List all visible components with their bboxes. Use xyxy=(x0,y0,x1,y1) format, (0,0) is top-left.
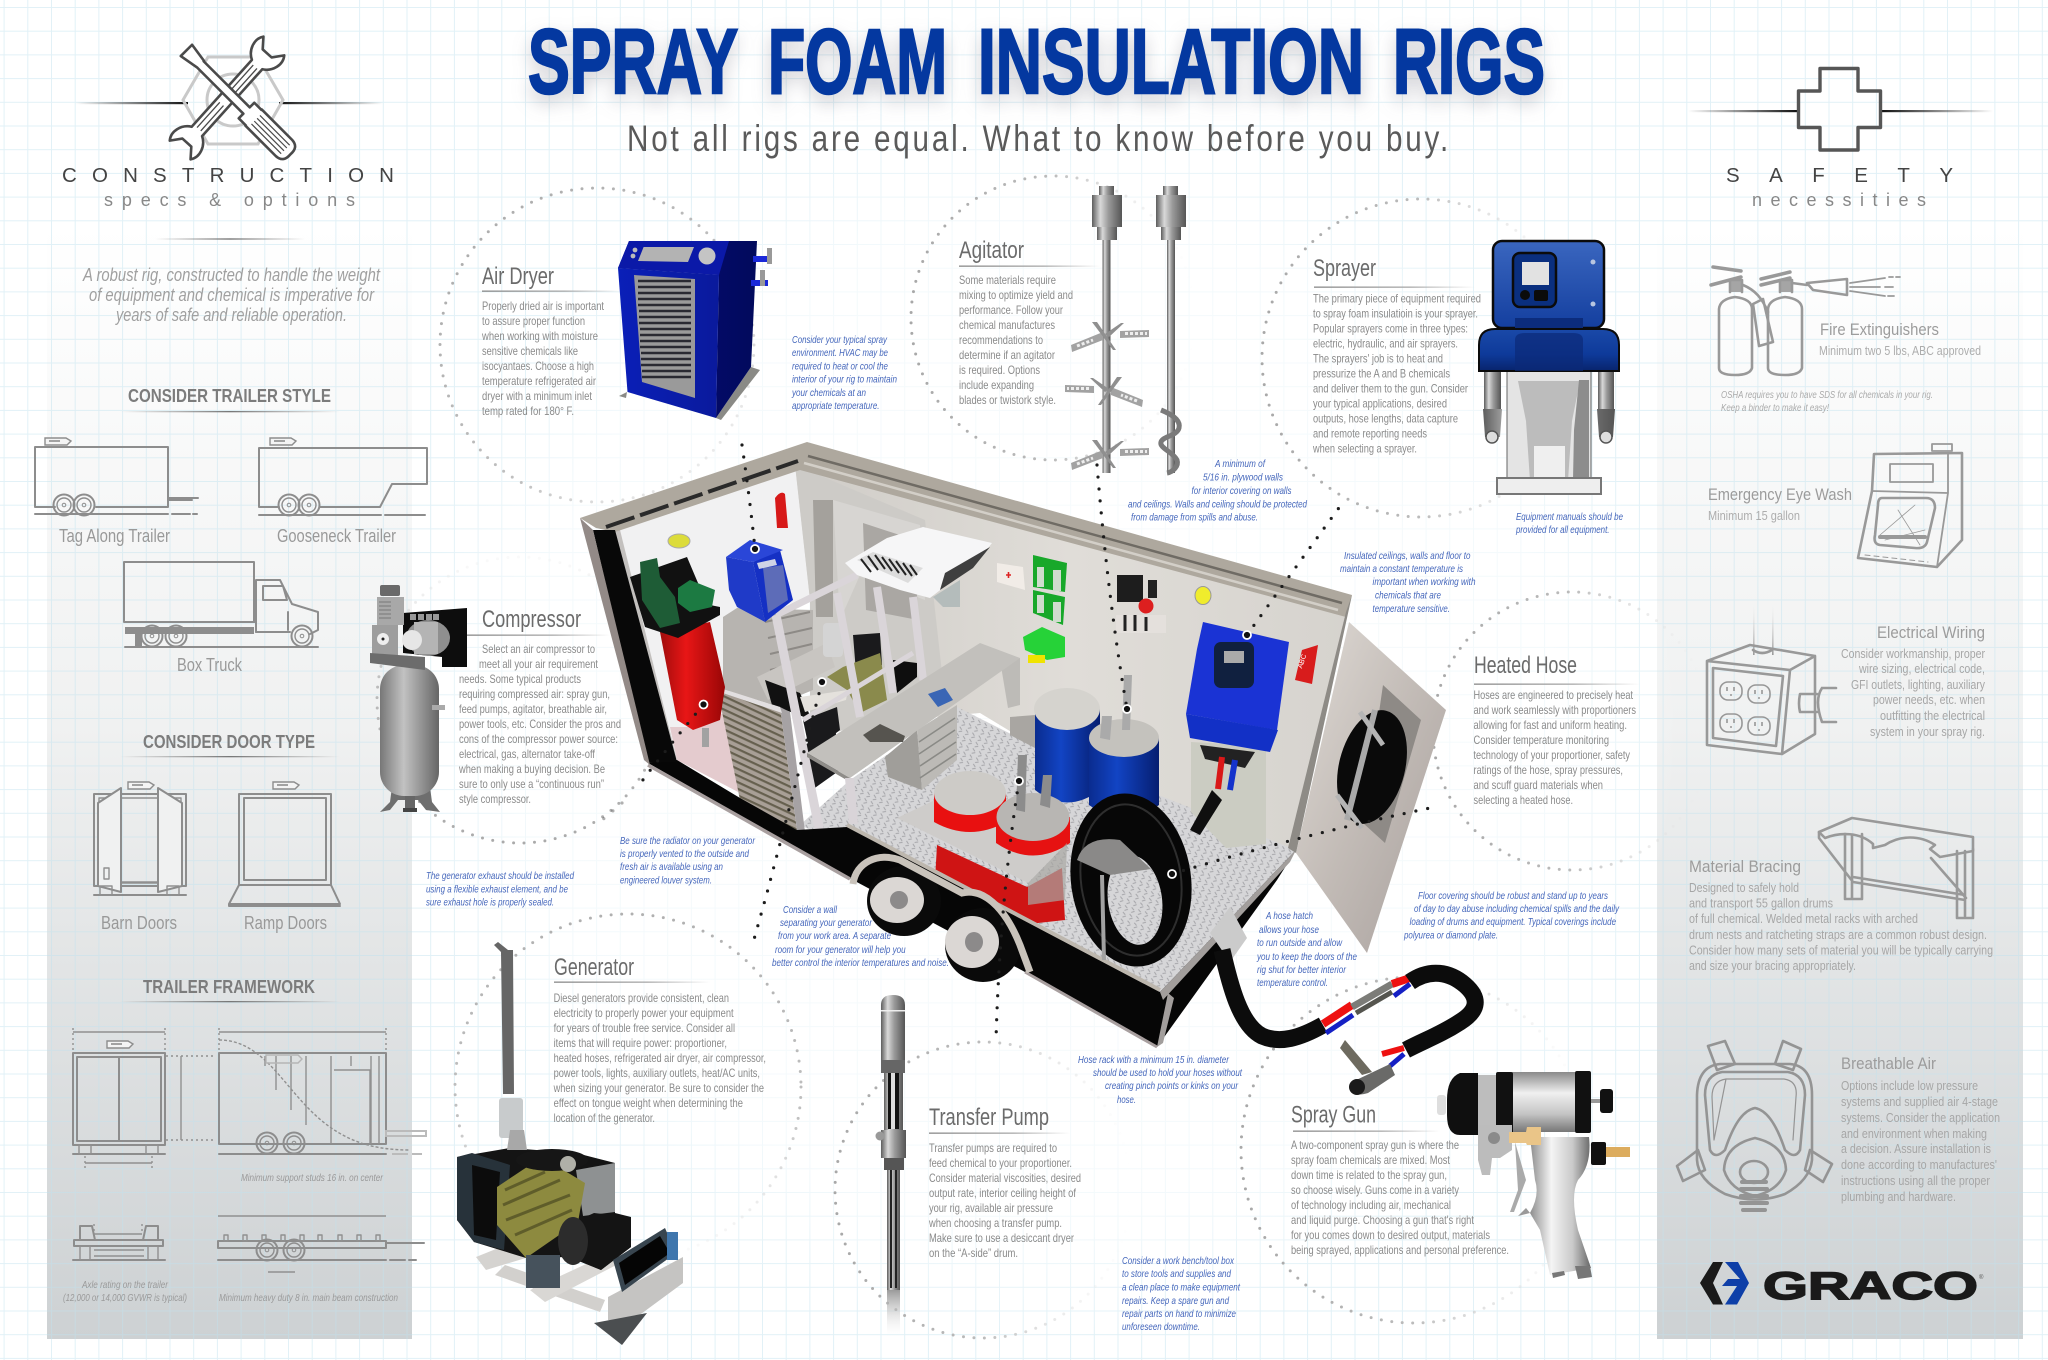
callout: air dryer: dryer with a minimum inlet xyxy=(482,389,593,403)
callout: air dryer: Properly dried air is important xyxy=(482,299,605,313)
callout: air dryer: when working with moisture xyxy=(481,329,598,343)
text: electrical wiring xyxy=(1841,624,1986,739)
text: breathable air: done according to manufactures' xyxy=(1841,1158,1997,1172)
note: hose hatch: allows your hose xyxy=(1259,924,1319,936)
text: breathable air: systems. Consider the application xyxy=(1841,1111,2000,1125)
text: emergency eye wash: Minimum 15 gallon xyxy=(1708,509,1800,523)
callout: compressor: feed pumps, agitator, breathable air, xyxy=(459,702,607,716)
title: INSULATION xyxy=(978,11,1364,113)
heading: consider door type: CONSIDER DOOR TYPE xyxy=(143,732,315,752)
icon: transfer pump xyxy=(876,995,906,1336)
note: hose hatch: A hose hatch xyxy=(1265,910,1313,922)
callout: heated hose: allowing for fast and uniform heating. xyxy=(1474,718,1627,732)
illustration: hose and small gun xyxy=(1222,950,1475,1095)
callout: generator: Diesel generators provide consistent, clean xyxy=(554,991,729,1005)
heading: consider trailer style: CONSIDER TRAILER STYLE xyxy=(128,386,331,406)
note: hose hatch: rig shut for better interior xyxy=(1257,964,1346,976)
note: plywood walls: 5/16 in. plywood walls xyxy=(1203,472,1284,484)
callout: air dryer: sensitive chemicals like xyxy=(482,344,578,358)
note: typical spray environment: Consider your typical spray xyxy=(792,334,888,346)
door labels xyxy=(101,913,327,933)
callout: sprayer: electric, hydraulic, and air sprayers. xyxy=(1313,336,1458,350)
callout: generator xyxy=(553,954,766,1125)
text: breathable air: and environment when making xyxy=(1841,1127,1987,1141)
subheading: necessities: necessities xyxy=(1752,190,1926,210)
note: insulated ceilings: chemicals that are xyxy=(1375,590,1441,602)
callout: air dryer: isocyantaes. Choose a high xyxy=(482,359,594,373)
icon: box truck xyxy=(124,562,318,648)
callout: agitator: include expanding xyxy=(959,378,1034,392)
callout: transfer pump: when choosing a transfer pump. xyxy=(928,1216,1062,1230)
callout: spray gun: down time is related to the spray gun, xyxy=(1291,1168,1447,1182)
note: plywood walls: and ceilings. Walls and ceiling should be protected xyxy=(1128,498,1308,510)
callout: spray gun: and liquid purge. Choosing a gun that's right xyxy=(1291,1213,1475,1227)
subheading: specs and options: specs & options xyxy=(104,190,355,210)
callout: generator: when sizing your generator. Be sure to consider the xyxy=(553,1081,764,1095)
callout: agitator: recommendations to xyxy=(959,333,1043,347)
note: plywood walls: from damage from spills and abuse. xyxy=(1131,512,1258,524)
note: work bench: Consider a work bench/tool box xyxy=(1122,1255,1235,1267)
callout: agitator: determine if an agitator xyxy=(959,348,1055,362)
note: hose rack xyxy=(1078,1054,1243,1106)
callout: spray gun: so choose wisely. Guns come in a variety xyxy=(1291,1183,1459,1197)
callout: heated hose: Heated Hose xyxy=(1474,652,1577,679)
note: typical spray environment: appropriate temperature. xyxy=(792,400,880,412)
panel: safety background xyxy=(1657,225,2023,1339)
text: electrical wiring: system in your spray rig. xyxy=(1870,725,1985,739)
callout: spray gun: of technology including air, mechanical xyxy=(1291,1198,1451,1212)
yellow light right xyxy=(1195,586,1211,604)
top rail xyxy=(580,442,1352,617)
note: typical spray environment: environment. HVAC may be xyxy=(792,347,888,359)
icon: material bracing rack xyxy=(1819,818,1973,918)
text: breathable air: Breathable Air xyxy=(1841,1055,1936,1073)
note: plywood walls: for interior covering on walls xyxy=(1192,485,1292,497)
note: floor covering: Floor covering should be robust and stand up to years xyxy=(1418,890,1609,902)
callout: spray gun: for you comes down to desired output, materials xyxy=(1291,1228,1490,1242)
callout: sprayer: and remote reporting needs xyxy=(1313,426,1427,440)
callout: agitator: performance. Follow your xyxy=(959,303,1063,317)
icon: fire extinguishers xyxy=(1711,267,1900,375)
callout: agitator xyxy=(959,237,1100,407)
callout: transfer pump: Transfer pumps are required to xyxy=(929,1141,1057,1155)
callout: heated hose: and scuff guard materials when xyxy=(1474,778,1603,792)
captions: axle and beam: Minimum heavy duty 8 in. main beam construction xyxy=(219,1292,398,1304)
icon: sprayer unit xyxy=(1479,241,1619,494)
callout: sprayer: when selecting a sprayer. xyxy=(1312,442,1417,456)
callout: compressor xyxy=(458,606,621,806)
icon: gooseneck trailer xyxy=(259,438,427,516)
rear black frame xyxy=(593,530,677,763)
icon: eye wash station xyxy=(1858,444,1962,567)
note: OSHA SDS xyxy=(1721,390,1933,414)
icon: crossed tools xyxy=(75,35,383,163)
text: electrical wiring: outfitting the electrical xyxy=(1880,709,1985,723)
dotted circles behind feature callouts xyxy=(377,176,1711,1338)
callout: sprayer: Sprayer xyxy=(1313,255,1376,282)
text: emergency eye wash: Emergency Eye Wash xyxy=(1708,486,1852,504)
callout: generator: effect on tongue weight when determining the xyxy=(554,1096,743,1110)
icon: agitators xyxy=(1065,186,1186,473)
panel: construction background xyxy=(47,225,412,1339)
callout: sprayer: and deliver them to the gun. Consider xyxy=(1313,382,1468,396)
note: hose hatch xyxy=(1256,910,1357,989)
first aid box xyxy=(997,563,1025,590)
callout: spray gun: spray foam chemicals are mixed. Most xyxy=(1291,1153,1451,1167)
callout: air dryer: temp rated for 180° F. xyxy=(482,404,574,418)
title: SPRAY xyxy=(528,11,738,113)
text: material bracing: and transport 55 gallon drums xyxy=(1689,896,1833,910)
diagram: axle front view xyxy=(73,1224,165,1260)
ring markers xyxy=(700,545,1251,878)
note: hose rack: Hose rack with a minimum 15 in. diameter xyxy=(1078,1054,1229,1066)
hose hatch xyxy=(1210,907,1247,962)
note: floor covering xyxy=(1403,890,1620,942)
dotted leader lines xyxy=(600,445,1435,1040)
caption: support studs: Minimum support studs 16 in. on center xyxy=(241,1172,383,1184)
intro text: construction xyxy=(82,265,381,325)
note: work bench: to store tools and supplies and xyxy=(1122,1268,1232,1280)
sprayer in trailer xyxy=(1186,622,1289,848)
trailer labels xyxy=(59,526,396,675)
note: hose rack: hose. xyxy=(1117,1094,1136,1106)
trailer labels: Box Truck xyxy=(177,655,243,675)
callout: spray gun: Spray Gun xyxy=(1291,1102,1376,1128)
icon: barn doors xyxy=(94,782,186,895)
note: work bench: repairs. Keep a spare gun and xyxy=(1122,1295,1230,1307)
note: floor covering: loading of drums and equipment. Typical coverings include xyxy=(1410,916,1616,928)
note: insulated ceilings: temperature sensitive. xyxy=(1372,603,1450,615)
wheels xyxy=(853,857,1030,982)
note: hose rack: creating pinch points or kinks on your xyxy=(1105,1080,1238,1092)
note: insulated ceilings: important when working with xyxy=(1372,576,1476,588)
door jamb xyxy=(1288,595,1352,853)
callout: compressor: Compressor xyxy=(482,606,581,633)
callout: compressor: meet all your air requirement xyxy=(479,657,599,671)
note: radiator: fresh air is available using an xyxy=(620,861,723,873)
note: plywood walls: A minimum of xyxy=(1214,458,1266,470)
trailer labels: Tag Along Trailer xyxy=(59,526,170,546)
text: fire extinguishers: Minimum two 5 lbs, ABC approved xyxy=(1819,344,1981,358)
note: generator exhaust: sure exhaust hole is properly sealed. xyxy=(426,896,554,908)
note: radiator: engineered louver system. xyxy=(620,874,712,886)
subtitle: Not all rigs are equal. What to know before you buy. xyxy=(627,118,1451,159)
callout: transfer pump: feed chemical to your proportioner. xyxy=(929,1156,1072,1170)
heading: trailer framework: TRAILER FRAMEWORK xyxy=(143,977,315,997)
text: breathable air xyxy=(1841,1055,2000,1204)
text: breathable air: instructions using all the proper xyxy=(1841,1174,1990,1188)
generator room equipment xyxy=(723,608,917,790)
note: radiator: Be sure the radiator on your generator xyxy=(620,835,755,847)
icon: generator xyxy=(457,942,683,1345)
note: wall separating generator xyxy=(772,904,949,969)
diagram: framework front view xyxy=(73,1028,216,1170)
callout: sprayer xyxy=(1312,255,1481,456)
callout: agitator: is required. Options xyxy=(959,363,1040,377)
louver panel xyxy=(717,687,797,830)
note: wall separating generator: from your work area. A separate xyxy=(778,930,891,942)
intro text: construction: A robust rig, constructed to handle the weight xyxy=(82,265,381,285)
text: material bracing: drum nests and ratcheting straps are a common robust design. xyxy=(1689,928,1987,942)
note: equipment manuals xyxy=(1515,511,1623,536)
callout: heated hose: ratings of the hose, spray pressures, xyxy=(1474,763,1623,777)
callout: generator: electricity to properly power your equipment xyxy=(554,1006,734,1020)
callout: sprayer: pressurize the A and B chemicals xyxy=(1313,366,1450,380)
note: hose rack: should be used to hold your hoses without xyxy=(1093,1067,1243,1079)
text: electrical wiring: GFI outlets, lighting, auxiliary xyxy=(1851,678,1986,692)
heading: safety: SAFETY xyxy=(1726,164,1953,187)
text: material bracing: and size your bracing appropriately. xyxy=(1689,959,1856,973)
note: radiator xyxy=(620,835,755,886)
callout: transfer pump: Transfer Pump xyxy=(929,1104,1049,1131)
note: typical spray environment: interior of your rig to maintain xyxy=(792,374,897,386)
callout: generator: Generator xyxy=(554,954,634,981)
text: material bracing: Material Bracing xyxy=(1689,858,1801,876)
door labels: Ramp Doors xyxy=(244,913,327,933)
icon: air dryer unit xyxy=(618,241,772,420)
note: hose hatch: temperature control. xyxy=(1257,977,1328,989)
green compressor motor xyxy=(630,557,720,638)
first aid cross xyxy=(1006,572,1011,578)
logo: graco: ® xyxy=(1979,1274,1984,1281)
icon: electrical box xyxy=(1707,603,1836,754)
air conditioner unit xyxy=(845,527,992,607)
callout: transfer pump: on the “A-side” drum. xyxy=(929,1246,1018,1260)
text: fire extinguishers xyxy=(1819,321,1981,358)
logo: graco xyxy=(1700,1262,1984,1308)
blue drums xyxy=(1034,675,1159,818)
hose reel xyxy=(1059,785,1203,975)
red air compressor tank xyxy=(660,622,725,730)
partition frame xyxy=(776,575,923,833)
callout: generator: heated hoses, refrigerated air dryer, air compressor, xyxy=(554,1051,766,1065)
captions: axle and beam xyxy=(63,1279,398,1304)
text: breathable air: Options include low pressure xyxy=(1841,1079,1978,1093)
callout: generator: location of the generator. xyxy=(554,1111,655,1125)
text: emergency eye wash xyxy=(1708,486,1852,523)
illustration: trailer interior cutaway xyxy=(580,442,1446,1047)
callout: spray gun xyxy=(1291,1102,1509,1257)
table and red drums xyxy=(897,755,1070,925)
callout: transfer pump: your rig, available air pressure xyxy=(929,1201,1053,1215)
title xyxy=(528,11,1545,113)
callout: air dryer: to assure proper function xyxy=(482,314,585,328)
callout: spray gun: being sprayed, applications and personal preference. xyxy=(1291,1243,1509,1257)
callout: agitator: blades or twistork style. xyxy=(959,393,1056,407)
note: wall separating generator: separating your generator xyxy=(780,917,872,929)
callout: heated hose: and work seamlessly with proportioners xyxy=(1474,703,1636,717)
note: equipment manuals: provided for all equipment. xyxy=(1515,524,1610,536)
callout: compressor: cons of the compressor power source: xyxy=(459,732,618,746)
callout: sprayer: The primary piece of equipment required xyxy=(1313,292,1481,306)
note: radiator: is properly vented to the outside and xyxy=(620,848,750,860)
note: floor covering: polyurea or diamond plate. xyxy=(1403,930,1498,942)
callout: sprayer: The sprayers' job is to heat and xyxy=(1313,352,1443,366)
callout: sprayer: outputs, hose lengths, data capture xyxy=(1313,412,1458,426)
callout: transfer pump xyxy=(928,1104,1081,1260)
note: wall separating generator: Consider a wall xyxy=(783,904,837,916)
callout: compressor: electrical, gas, alternator take-off xyxy=(459,747,596,761)
text: material bracing: of full chemical. Welded metal racks with arched xyxy=(1689,912,1918,926)
callout: agitator: chemical manufactures xyxy=(959,318,1055,332)
diagram: main beam side view xyxy=(218,1216,424,1272)
note: hose hatch: you to keep the doors of the xyxy=(1256,951,1357,963)
captions: axle and beam: (12,000 or 14,000 GVWR is typical) xyxy=(63,1292,187,1304)
callout: compressor: requiring compressed air: spray gun, xyxy=(459,687,610,701)
callout: compressor: Select an air compressor to xyxy=(482,642,595,656)
title: RIGS xyxy=(1393,11,1545,113)
callout: compressor: power tools, etc. Consider the pros and xyxy=(459,717,621,731)
callout: heated hose: Hoses are engineered to precisely heat xyxy=(1474,688,1634,702)
note: work bench xyxy=(1122,1255,1241,1333)
trailer labels: Gooseneck Trailer xyxy=(277,526,396,546)
text: material bracing: Designed to safely hold xyxy=(1689,881,1799,895)
fire extinguisher right: ABC xyxy=(1297,654,1308,669)
callout: transfer pump: Consider material viscosities, desired xyxy=(929,1171,1081,1185)
icon: respirator mask xyxy=(1677,1041,1832,1210)
fire extinguisher right xyxy=(1295,645,1318,684)
work bench xyxy=(807,643,1020,824)
green chemical station xyxy=(1023,555,1067,663)
text: breathable air: plumbing and hardware. xyxy=(1841,1190,1956,1204)
note: typical spray environment xyxy=(791,334,897,412)
note: wall separating generator: better control the interior temperatures and noise. xyxy=(772,957,949,969)
section header: safety xyxy=(1688,68,1993,210)
callout: air dryer: Air Dryer xyxy=(482,263,554,290)
note: generator exhaust: The generator exhaust should be installed xyxy=(426,870,575,882)
note: hose hatch: to run outside and allow xyxy=(1257,937,1343,949)
callout: transfer pump: output rate, interior ceiling height of xyxy=(929,1186,1077,1200)
callout: compressor: needs. Some typical products xyxy=(459,672,581,686)
text: fire extinguishers: Fire Extinguishers xyxy=(1820,321,1939,339)
icon: ramp doors xyxy=(229,782,340,906)
note: floor covering: of day to day abuse including chemical spills and the daily xyxy=(1414,903,1620,915)
note: work bench: a clean place to make equipment xyxy=(1122,1282,1241,1294)
text: electrical wiring: power needs, etc. when xyxy=(1873,693,1985,707)
section header: construction xyxy=(62,35,394,210)
note: generator exhaust xyxy=(426,870,575,908)
icon: safety cross xyxy=(1688,68,1993,150)
text: electrical wiring: Consider workmanship, proper xyxy=(1841,647,1985,661)
trailer skirt and frame band xyxy=(648,760,1296,1047)
callout: generator: power tools, lights, auxiliary outlets, heat/AC units, xyxy=(554,1066,760,1080)
text: breathable air: systems and supplied air 4-stage xyxy=(1841,1095,1998,1109)
callout: generator: for years of trouble free service. Consider all xyxy=(554,1021,735,1035)
callout: heated hose: selecting a heated hose. xyxy=(1474,793,1573,807)
note: typical spray environment: required to heat or cool the xyxy=(792,360,888,372)
callout: air dryer: temperature refrigerated air xyxy=(482,374,596,388)
door labels: Barn Doors xyxy=(101,913,177,933)
rear room background xyxy=(795,465,945,740)
trailer door with hose rack view xyxy=(1296,622,1446,953)
callout: heated hose xyxy=(1474,652,1640,807)
heading: construction: CONSTRUCTION xyxy=(62,164,394,187)
text: material bracing: Consider how many sets of material you will be typically carrying xyxy=(1689,944,1993,958)
note: OSHA SDS: Keep a binder to make it easy! xyxy=(1721,403,1829,414)
intro text: construction: years of safe and reliable operation. xyxy=(114,305,347,325)
note: work bench: repair parts on hand to minimize xyxy=(1122,1308,1236,1320)
diagram: framework side view xyxy=(219,1028,426,1154)
callout: sprayer: to spray foam insulatioin is your sprayer. xyxy=(1313,306,1478,320)
callout: sprayer: Popular sprayers come in three types: xyxy=(1313,322,1468,336)
callout: compressor: style compressor. xyxy=(459,792,531,806)
text: electrical wiring: wire sizing, electrical code, xyxy=(1858,662,1985,676)
callout: agitator: mixing to optimize yield and xyxy=(959,288,1073,302)
note: plywood walls xyxy=(1128,458,1308,524)
note: equipment manuals: Equipment manuals should be xyxy=(1516,511,1623,523)
callout: heated hose: Consider temperature monitoring xyxy=(1474,733,1609,747)
callout: compressor: sure to only use a “continuous run” xyxy=(459,777,604,791)
generator room wall xyxy=(610,465,810,760)
intro text: construction: of equipment and chemical is imperative for xyxy=(89,285,375,305)
logo: graco: GRACO xyxy=(1763,1265,1978,1308)
text: breathable air: a decision. Assure installation is xyxy=(1841,1142,1991,1156)
callout: compressor: when making a buying decision. Be xyxy=(458,762,605,776)
note: OSHA SDS: OSHA requires you to have SDS for all chemicals in your rig. xyxy=(1721,390,1933,401)
icon: spray gun xyxy=(1437,1071,1630,1279)
note: generator exhaust: using a flexible exhaust element, and be xyxy=(426,884,568,896)
icon: compressor unit xyxy=(370,585,467,812)
note: typical spray environment: your chemicals at an xyxy=(791,387,866,399)
callout: agitator: Agitator xyxy=(959,237,1024,264)
electrical panel xyxy=(1116,575,1166,633)
callout: spray gun: A two-component spray gun is where the xyxy=(1291,1138,1459,1152)
note: wall separating generator: room for your generator will help you xyxy=(775,944,906,956)
centre wash over grid xyxy=(400,100,1680,1340)
callout: heated hose: technology of your proportioner, safety xyxy=(1474,748,1630,762)
callout: sprayer: your typical applications, desired xyxy=(1313,396,1447,410)
callout: transfer pump: Make sure to use a desiccant dryer xyxy=(929,1231,1074,1245)
note: insulated ceilings xyxy=(1340,550,1476,615)
text: electrical wiring: Electrical Wiring xyxy=(1877,624,1985,642)
note: work bench: unforeseen downtime. xyxy=(1122,1321,1200,1333)
callout: generator: items that will require power: proportioner, xyxy=(554,1036,727,1050)
text: material bracing xyxy=(1689,858,1993,973)
note: insulated ceilings: Insulated ceilings, walls and floor to xyxy=(1344,550,1471,562)
blue air dryer in trailer xyxy=(726,540,793,622)
callout: agitator: Some materials require xyxy=(959,273,1056,287)
yellow light left xyxy=(668,534,690,548)
captions: axle and beam: Axle rating on the trailer xyxy=(81,1279,168,1291)
note: insulated ceilings: maintain a constant temperature is xyxy=(1340,563,1464,575)
icon: tag along trailer xyxy=(35,438,198,516)
callout: air dryer xyxy=(481,263,620,418)
fire extinguisher left xyxy=(775,493,788,528)
trailer back wall xyxy=(795,465,1346,852)
title: FOAM xyxy=(768,11,947,113)
diamond plate floor xyxy=(800,707,1296,995)
